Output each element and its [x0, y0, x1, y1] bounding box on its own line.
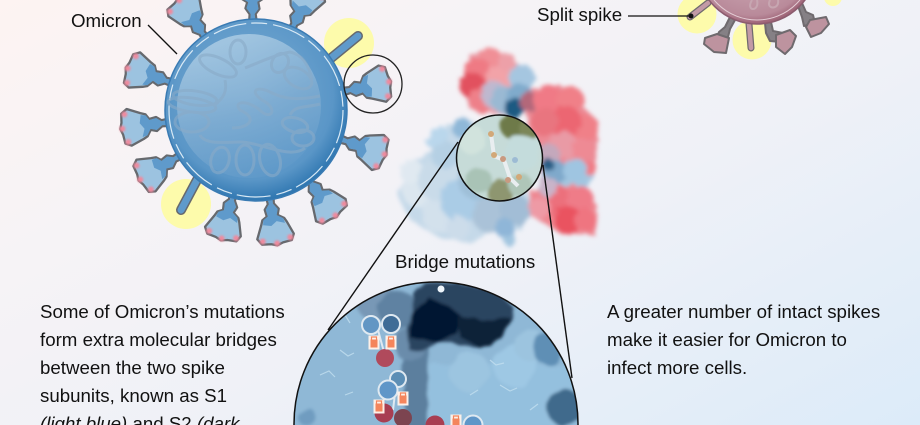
text block: right description: make it easier for Omicron to — [607, 329, 847, 350]
molecule base shapes — [397, 47, 597, 243]
label: Split spike: Split spike — [537, 4, 622, 25]
text block: left description: between the two spike — [40, 357, 225, 378]
lock icons — [368, 336, 462, 425]
intact spikes — [117, 0, 396, 249]
molecule: spike protein surface — [397, 47, 598, 246]
text block: right description: A greater number of intact spikes — [607, 301, 880, 322]
pink S1 right — [531, 85, 598, 184]
panel: bridge mutations close-up — [290, 280, 585, 425]
spikes — [704, 3, 829, 54]
light blue S2 region — [400, 118, 531, 246]
surface flecks — [320, 315, 538, 410]
split spikes — [181, 36, 358, 210]
genome strand — [167, 40, 320, 178]
label: Omicron: Omicron — [71, 10, 142, 31]
lens: bridge region on spike — [456, 114, 544, 202]
text block: right description: infect more cells. — [607, 357, 747, 378]
pink S1 lower — [529, 177, 596, 234]
mutation residues and bridges — [362, 315, 482, 425]
callout lines: zoom from lens to detail — [328, 142, 572, 378]
label: Split spike — [537, 4, 694, 25]
callout circle around intact spike — [344, 55, 402, 113]
text block: left description: subunits, known as S1 — [40, 385, 227, 406]
icon: Omicron virus — [117, 0, 396, 249]
icon: partial pink virus — [678, 0, 842, 60]
label: Bridge mutations: Bridge mutations — [395, 251, 535, 272]
yellow highlights on split spikes — [161, 18, 374, 229]
sphere — [697, 0, 817, 24]
yellow highlights — [678, 0, 842, 60]
label: Omicron — [71, 10, 177, 54]
inner membrane — [177, 34, 321, 178]
darker surface patches — [298, 280, 583, 425]
pink S1 upper — [459, 48, 540, 118]
sphere body — [165, 19, 347, 201]
text block: left description: Some of Omicron’s mutations — [40, 301, 285, 322]
text block: left description: form extra molecular bridges — [40, 329, 277, 350]
